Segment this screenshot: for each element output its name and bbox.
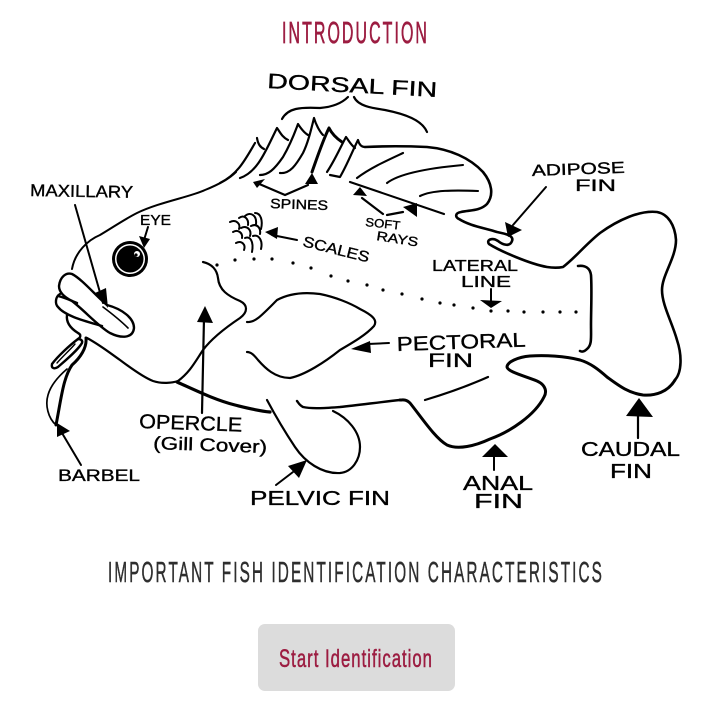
- arrow: opercle: [197, 306, 213, 413]
- label: anal fin: [463, 473, 533, 513]
- dorsal fin brace: [282, 97, 427, 132]
- head, mouth and barbel: [47, 262, 270, 425]
- label: opercle: (Gill Cover): [153, 433, 267, 457]
- label: dorsal fin: DORSAL FIN: [267, 70, 438, 102]
- arrows: soft rays: [353, 187, 417, 217]
- label: soft rays: [365, 215, 420, 250]
- arrow: maxillary: [75, 205, 108, 308]
- lateral line dots: [215, 257, 578, 314]
- pectoral fin: [247, 293, 375, 378]
- arrow: anal fin: [482, 444, 508, 470]
- label: scales: SCALES: [301, 233, 371, 266]
- arrow: caudal fin: [626, 398, 653, 438]
- label: lateral line: LATERAL: [432, 258, 518, 275]
- button: start identification: Start Identification: [279, 645, 433, 673]
- arrow: pelvic fin: [276, 460, 307, 485]
- label: caudal fin: FIN: [610, 461, 652, 483]
- label: pectoral fin: PECTORAL: [396, 330, 526, 356]
- label: barbel: BARBEL: [58, 466, 140, 485]
- label: maxillary: MAXILLARY: [30, 181, 133, 202]
- fish diagram: [47, 118, 681, 473]
- button: start identification: [258, 624, 455, 691]
- label: anal fin: ANAL: [463, 473, 533, 495]
- arrow: pectoral fin: [351, 341, 389, 353]
- arrow: barbel: [57, 423, 81, 465]
- arrow: lateral line: [480, 289, 502, 308]
- label: opercle: OPERCLE: [139, 411, 243, 437]
- soft dorsal rays: [350, 153, 478, 214]
- icon: eye: [112, 241, 148, 277]
- label: spines: SPINES: [270, 196, 328, 213]
- label: adipose fin: ADIPOSE: [532, 160, 625, 180]
- arrow: eye: [139, 227, 150, 248]
- label: pectoral fin: FIN: [428, 351, 473, 372]
- label: soft rays: RAYS: [376, 228, 420, 250]
- arrow: adipose fin: [505, 187, 546, 237]
- label: eye: EYE: [140, 212, 171, 229]
- label: pectoral fin: [396, 330, 526, 372]
- label: lateral line: LINE: [461, 274, 511, 291]
- fish body outline: [72, 118, 681, 473]
- label: soft rays: SOFT: [365, 215, 402, 233]
- arrow: scales: [265, 227, 297, 240]
- label: adipose fin: [532, 160, 625, 195]
- label: adipose fin: FIN: [575, 176, 616, 195]
- title: INTRODUCTION: [282, 15, 429, 50]
- label: caudal fin: CAUDAL: [581, 439, 680, 461]
- arrows: spines: [253, 173, 318, 195]
- label: caudal fin: [581, 439, 680, 483]
- label: opercle: [139, 411, 267, 457]
- label: anal fin: FIN: [474, 491, 523, 513]
- label: lateral line: [432, 258, 518, 291]
- label: pelvic fin: PELVIC FIN: [250, 488, 390, 510]
- scales: [230, 213, 262, 252]
